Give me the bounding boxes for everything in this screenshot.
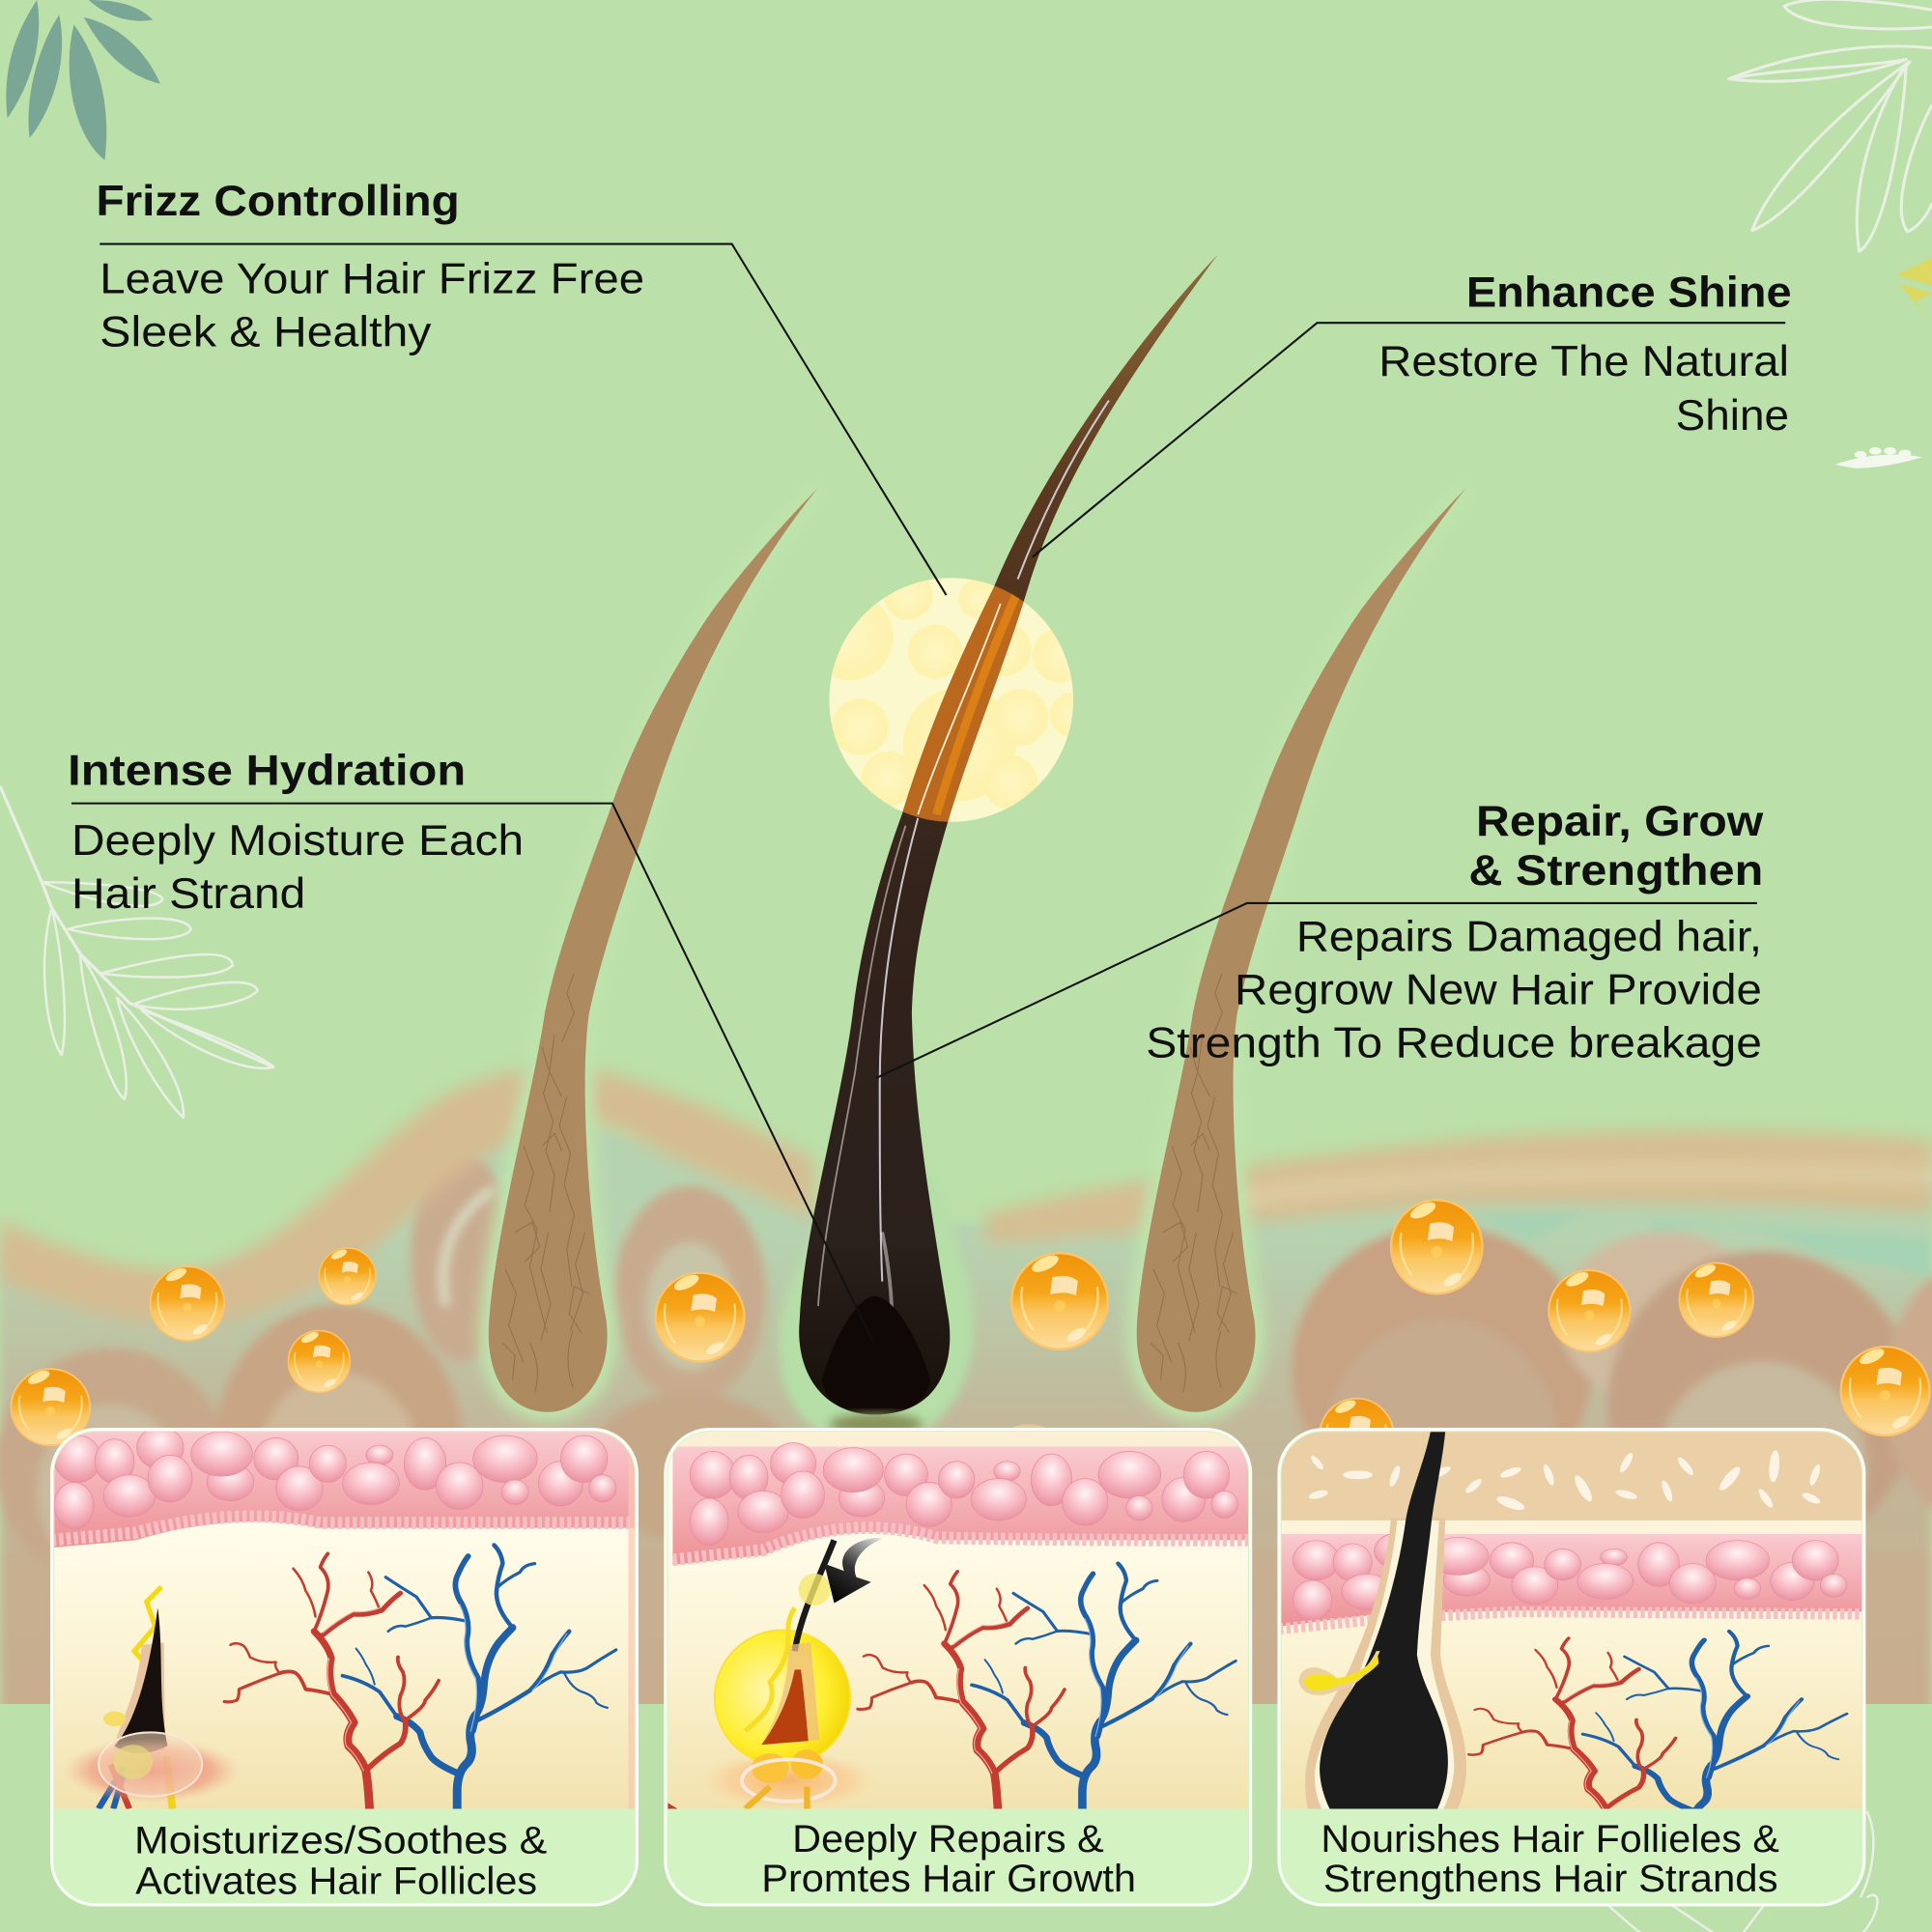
decorative accent: yellow leaf — [1896, 258, 1932, 323]
central dark hair strand — [799, 255, 1217, 1414]
epidermis flecks — [1308, 1450, 1822, 1513]
caption 3: Nourishes Hair Follieles & — [1321, 1818, 1779, 1861]
orange section of hair inside ball — [902, 585, 1024, 822]
caption 2: Promtes Hair Growth — [761, 1858, 1136, 1900]
golden oil capsules — [11, 1199, 1929, 1472]
arrow pointing to hair — [824, 1538, 882, 1603]
caption 1: Activates Hair Follicles — [135, 1860, 537, 1902]
callout: repair, grow and strengthen — [876, 798, 1764, 1078]
follicle illustration — [1298, 1432, 1466, 1824]
caption 2 — [761, 1818, 1136, 1900]
decorative leaves: left outline branch — [0, 786, 273, 1118]
heading: enhance shine: Enhance Shine — [1466, 270, 1792, 317]
heading: frizz controlling: Frizz Controlling — [96, 178, 460, 225]
callout: enhance shine: Restore The Natural — [1378, 338, 1789, 385]
right hair strand — [1137, 488, 1466, 1412]
callout: repair, grow and strengthen: Repairs Damaged hair, — [1296, 914, 1762, 961]
callout: repair, grow and strengthen: Regrow New Hair Provide — [1235, 967, 1762, 1014]
nutrient glow pool — [713, 1757, 864, 1804]
decorative leaves: top right outline — [1729, 0, 1932, 251]
callout: frizz controlling — [96, 178, 947, 595]
callout: intense hydration: Hair Strand — [71, 870, 305, 918]
panel 1: moisturizes and soothes — [52, 1427, 637, 1905]
heading: repair, grow and strengthen: Repair, Grow — [1476, 798, 1764, 845]
callout: enhance shine: Shine — [1676, 392, 1789, 440]
panel 3: nourishes follicles — [1279, 1430, 1864, 1905]
decorative accent: small white sprig — [1834, 447, 1922, 469]
heading: intense hydration: Intense Hydration — [68, 748, 466, 795]
follicle in yellow oil bubble — [715, 1540, 850, 1808]
panel 2: deeply repairs — [666, 1430, 1251, 1905]
caption 3 — [1321, 1818, 1779, 1900]
caption 1: Moisturizes/Soothes & — [134, 1819, 547, 1861]
olive shadow under centre bulb — [829, 1413, 923, 1435]
caption 2: Deeply Repairs & — [792, 1818, 1104, 1861]
callout: intense hydration — [68, 748, 872, 1341]
pale glow around centre follicle — [779, 1060, 974, 1444]
callout: frizz controlling: Sleek & Healthy — [99, 308, 432, 355]
callout: repair, grow and strengthen: Strength To Reduce breakage — [1146, 1019, 1762, 1066]
follicle illustration — [63, 1587, 241, 1808]
decorative leaves: top left — [6, 0, 160, 160]
heading: repair, grow and strengthen: & Strengthen — [1468, 847, 1763, 895]
decorative leaves: bottom right outline — [1592, 1811, 1878, 1932]
caption 3: Strengthens Hair Strands — [1323, 1858, 1778, 1900]
callout: intense hydration: Deeply Moisture Each — [71, 817, 524, 865]
yellow nutrient ball — [829, 578, 1073, 822]
heading: repair, grow and strengthen — [1468, 798, 1764, 895]
callout: frizz controlling: Leave Your Hair Frizz Free — [99, 256, 644, 303]
callout: enhance shine — [1033, 270, 1792, 557]
scalp skin background with waves and follicle domes — [0, 1067, 1932, 1725]
caption 1 — [134, 1819, 547, 1902]
left hair strand — [489, 488, 818, 1412]
